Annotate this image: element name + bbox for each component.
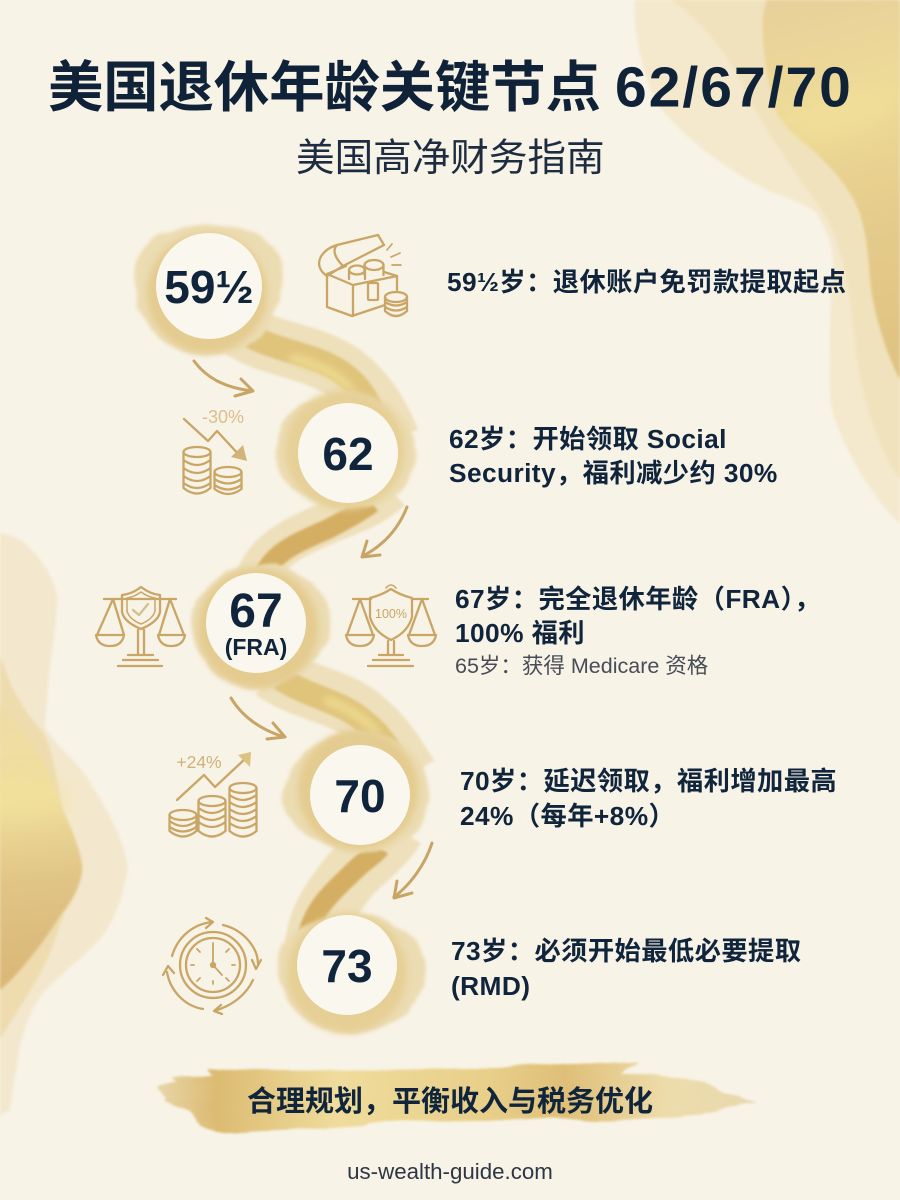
ribbon: 59½ to 62 (240, 330, 392, 440)
arrow: 62 to 67 (362, 507, 407, 557)
text: 67: 67岁：完全退休年龄（FRA）， (455, 584, 821, 614)
subtitle: 美国高净财务指南 (296, 137, 605, 180)
node: 70 (310, 745, 410, 845)
icon: falling coins -30%: -30% (202, 407, 244, 427)
icon: rising coins +24%: +24% (176, 752, 222, 772)
text: 73 (451, 936, 801, 1001)
footer url: us-wealth-guide.com (347, 1159, 553, 1184)
icon: rising coins +24% (170, 752, 256, 836)
title: 美国退休年龄关键节点 (48, 56, 601, 118)
icon: clock with cycle arrows (163, 918, 261, 1014)
text: 70: 24%（每年+8%） (460, 801, 675, 831)
text: 67 (455, 584, 821, 678)
icon: treasure chest (319, 235, 407, 316)
arrowhead (231, 445, 247, 461)
node: 67 (FRA): 67 (229, 585, 283, 638)
ring: 62 (275, 390, 417, 510)
title: 62/67/70 (615, 56, 853, 120)
text: 67: 100% 福利 (455, 618, 585, 648)
ring: 73 (278, 913, 425, 1033)
node: 67 (FRA) (206, 573, 306, 673)
arrow: 59½ to 62 (194, 361, 253, 396)
text: 73: 73岁：必须开始最低必要提取 (451, 936, 801, 966)
text: 62 (449, 424, 778, 488)
node: 62: 62 (322, 428, 374, 480)
ribbon: 62 to 67 (255, 490, 390, 585)
watercolor wash: left (0, 533, 128, 1115)
text: Medicare note: 65岁：获得 Medicare 资格 (455, 654, 708, 678)
text: 59½: 59½岁：退休账户免罚款提取起点 (447, 267, 846, 297)
node: 70: 70 (334, 770, 386, 822)
icon: scales with 100% shield: 100% (375, 607, 407, 621)
arrow: 67 to 70 (231, 698, 285, 739)
path ribbons (240, 330, 410, 945)
node: 73 (297, 915, 397, 1015)
banner (157, 1060, 757, 1132)
ribbon: 67 to 70 (272, 672, 410, 775)
arrow: 70 to 73 (394, 843, 432, 898)
node: 73: 73 (321, 940, 373, 992)
icon: scales with 100% shield (346, 585, 436, 666)
text: 62: 62岁：开始领取 Social (449, 424, 727, 454)
node: 67 (FRA): (FRA) (225, 634, 287, 660)
icon: scales with check shield (96, 587, 185, 666)
text: 62: Security，福利减少约 30% (449, 458, 778, 488)
text: 73: (RMD) (451, 971, 530, 1001)
node: 59½ (156, 233, 262, 339)
text: 70: 70岁：延迟领取，福利增加最高 (460, 766, 837, 796)
node wash rings (134, 224, 430, 1033)
node: 59½: 59½ (164, 261, 254, 313)
ribbon: 70 to 73 (308, 828, 395, 945)
ring: 70 (283, 730, 430, 853)
arrowhead (238, 752, 251, 767)
ring: 59½ (134, 224, 284, 356)
text: 70 (460, 766, 837, 831)
ring: 67 (192, 564, 332, 688)
banner: 合理规划，平衡收入与税务优化 (247, 1085, 653, 1118)
node: 62 (298, 403, 398, 503)
watercolor wash: top right (634, 0, 900, 524)
icon: falling coins -30% (184, 407, 247, 494)
